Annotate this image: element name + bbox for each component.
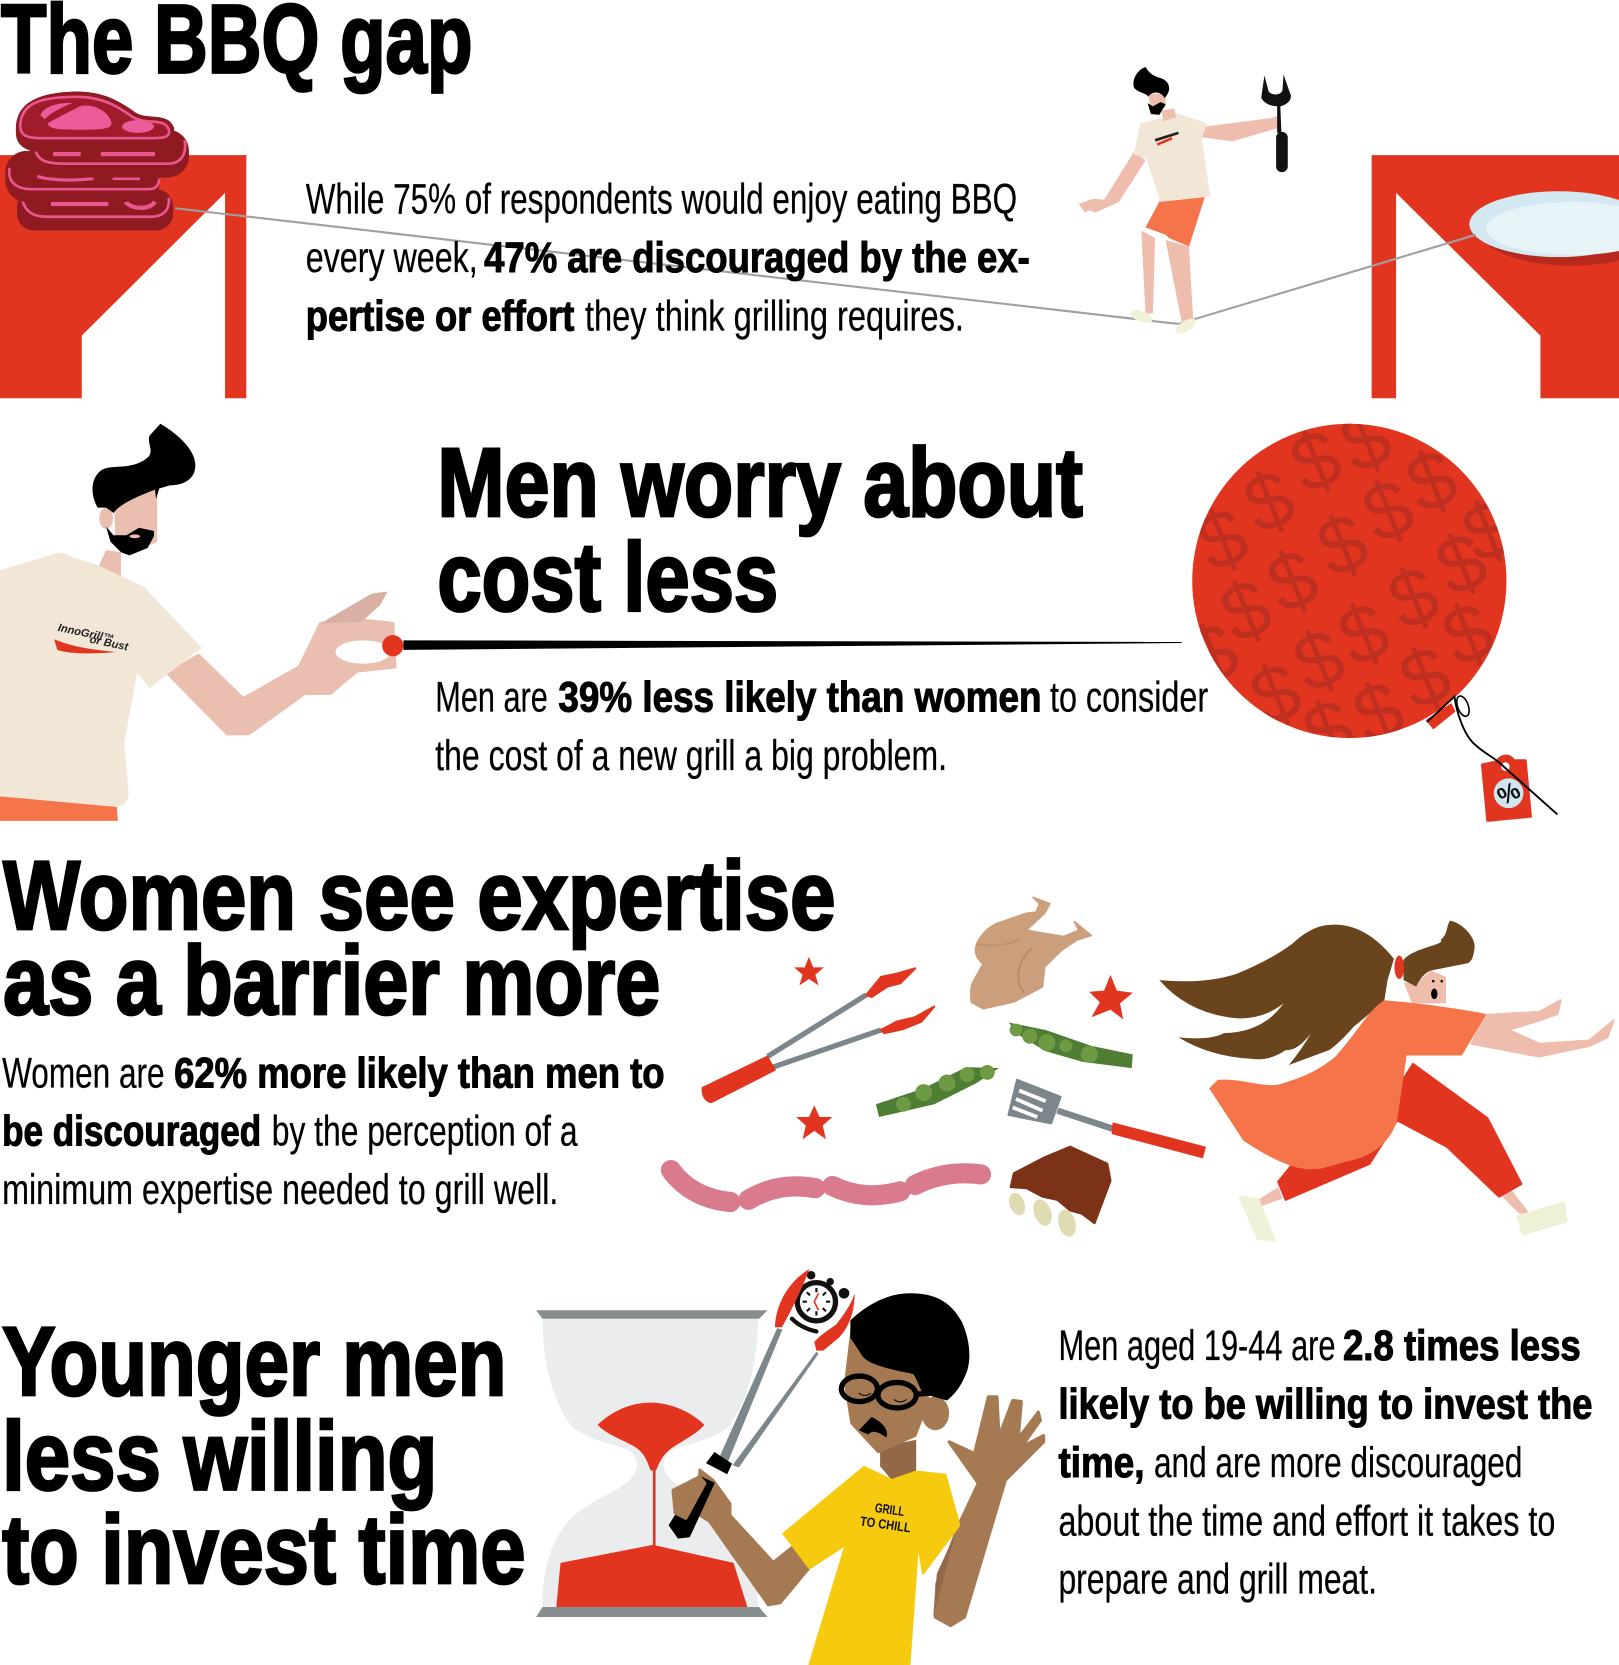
text block: BBQ gap stat: While 75% of respondents would enjoy eating BBQ [306,176,1017,223]
balloon dollar pattern [1199,424,1504,738]
heading: younger men less willing to invest time: to invest time [2,1495,526,1604]
balloon dollar pattern: $ [1424,514,1499,615]
balloon dollar pattern: $ [1185,490,1260,590]
left table [0,155,246,398]
heading: younger men less willing to invest time: less willing [2,1402,437,1511]
icon: dollar balloon with price tag: % [1493,777,1525,811]
heading: women see expertise: as a barrier more [3,926,660,1035]
icon: ribs [1006,1147,1110,1239]
balloon dollar pattern: $ [1232,452,1307,552]
text block: younger men stat: Men aged 19-44 are [1058,1322,1336,1369]
panel: women see expertise as a barrier [2,841,1614,1240]
icon: dollar balloon with price tag [1192,424,1558,822]
fist fingers [673,1477,705,1518]
icon: spatula [1009,1080,1206,1158]
icons: stars [794,957,1133,1139]
text block: BBQ gap stat: every week, [306,234,478,281]
balloon dollar pattern: $ [1394,431,1469,532]
arm holding tongs [695,1469,810,1605]
right table [1372,155,1619,398]
text block: women stat: Women are [2,1049,165,1096]
balloon dollar pattern: $ [1430,584,1505,685]
text block: men cost stat: to consider [1050,673,1208,720]
balloon dollar pattern: $ [1278,411,1354,512]
text block: younger men stat: prepare and grill meat. [1058,1556,1377,1603]
text block: men cost stat: the cost of a new grill a big problem. [435,732,947,779]
text block: women stat: be discouraged [2,1108,261,1155]
shirt text [859,1500,912,1535]
panel: the BBQ gap [0,0,1619,398]
illustration: running woman [1159,921,1614,1240]
balloon dollar pattern: $ [1328,391,1404,491]
balloon dollar pattern: $ [1208,561,1284,661]
balloon string line [403,640,1182,650]
balloon dollar pattern: $ [1388,628,1463,728]
text block: BBQ gap stat: pertise or effort [306,292,574,339]
shirt text: TO CHILL [859,1513,912,1535]
heading: younger men less willing to invest time: Younger men [2,1307,506,1416]
balloon dollar pattern: $ [1351,461,1426,561]
heading: men worry about cost less: Men worry about [437,428,1083,537]
plate [1469,191,1619,266]
text block: BBQ gap stat [306,176,1030,339]
icon: red tongs [702,968,934,1103]
icon: tongs with stopwatch [670,1269,855,1537]
text block: younger men stat [1058,1322,1592,1603]
balloon dollar pattern: $ [1305,495,1380,595]
icon: sausages [671,1170,981,1202]
red pin [382,635,403,656]
text block: younger men stat: 2.8 times less [1343,1322,1581,1369]
heading: women see expertise: Women see expertise [3,841,836,950]
text block: younger men stat: time, [1058,1439,1144,1486]
shirt logo: or Bust [89,634,130,654]
text block: men cost stat: 39% less likely than women [558,673,1041,720]
heading: men worry about cost less: cost less [437,523,778,632]
text block: men cost stat [435,673,1208,779]
text block: women stat [2,1049,665,1213]
heading: men worry about cost less [437,428,1083,632]
heading: younger men less willing to invest time [2,1307,526,1604]
shirt logo [57,622,130,654]
text block: women stat: minimum expertise needed to grill well. [2,1166,558,1213]
text block: women stat: by the perception of a [272,1108,578,1155]
balloon dollar pattern: $ [1291,681,1366,781]
balloon dollar pattern: $ [1238,645,1313,745]
icons: asparagus [876,1023,1133,1117]
balloon dollar pattern: $ [1450,481,1526,582]
balloon dollar pattern: $ [1376,548,1451,648]
illustration: man on tightrope with fork [1079,67,1291,337]
illustration: man pinching string [0,424,395,821]
balloon dollar pattern: $ [1341,663,1416,763]
balloon dollar pattern: $ [1255,531,1330,632]
text block: BBQ gap stat: 47% are discouraged by the ex- [484,234,1030,281]
shirt text: GRILL [874,1500,905,1519]
text block: BBQ gap stat: they think grilling requires. [585,292,964,339]
text block: women stat: 62% more likely than men to [174,1049,665,1096]
icon: chicken [971,897,1091,1009]
balloon dollar pattern: $ [1282,611,1357,711]
panel: men worry about cost less [0,391,1557,821]
illustration: man with glasses and yellow shirt [673,1293,1044,1665]
shirt logo: InnoGrill™ [57,622,115,646]
heading: women see expertise [3,841,836,1035]
icon: stack of steaks [5,91,189,231]
tightrope [175,208,1476,324]
icon: hourglass [536,1310,768,1617]
panel: younger men less willing to invest time [2,1269,1592,1665]
balloon dollar pattern: $ [1326,584,1401,685]
balloon dollar pattern: $ [1175,604,1251,705]
text block: men cost stat: Men are [435,673,548,720]
